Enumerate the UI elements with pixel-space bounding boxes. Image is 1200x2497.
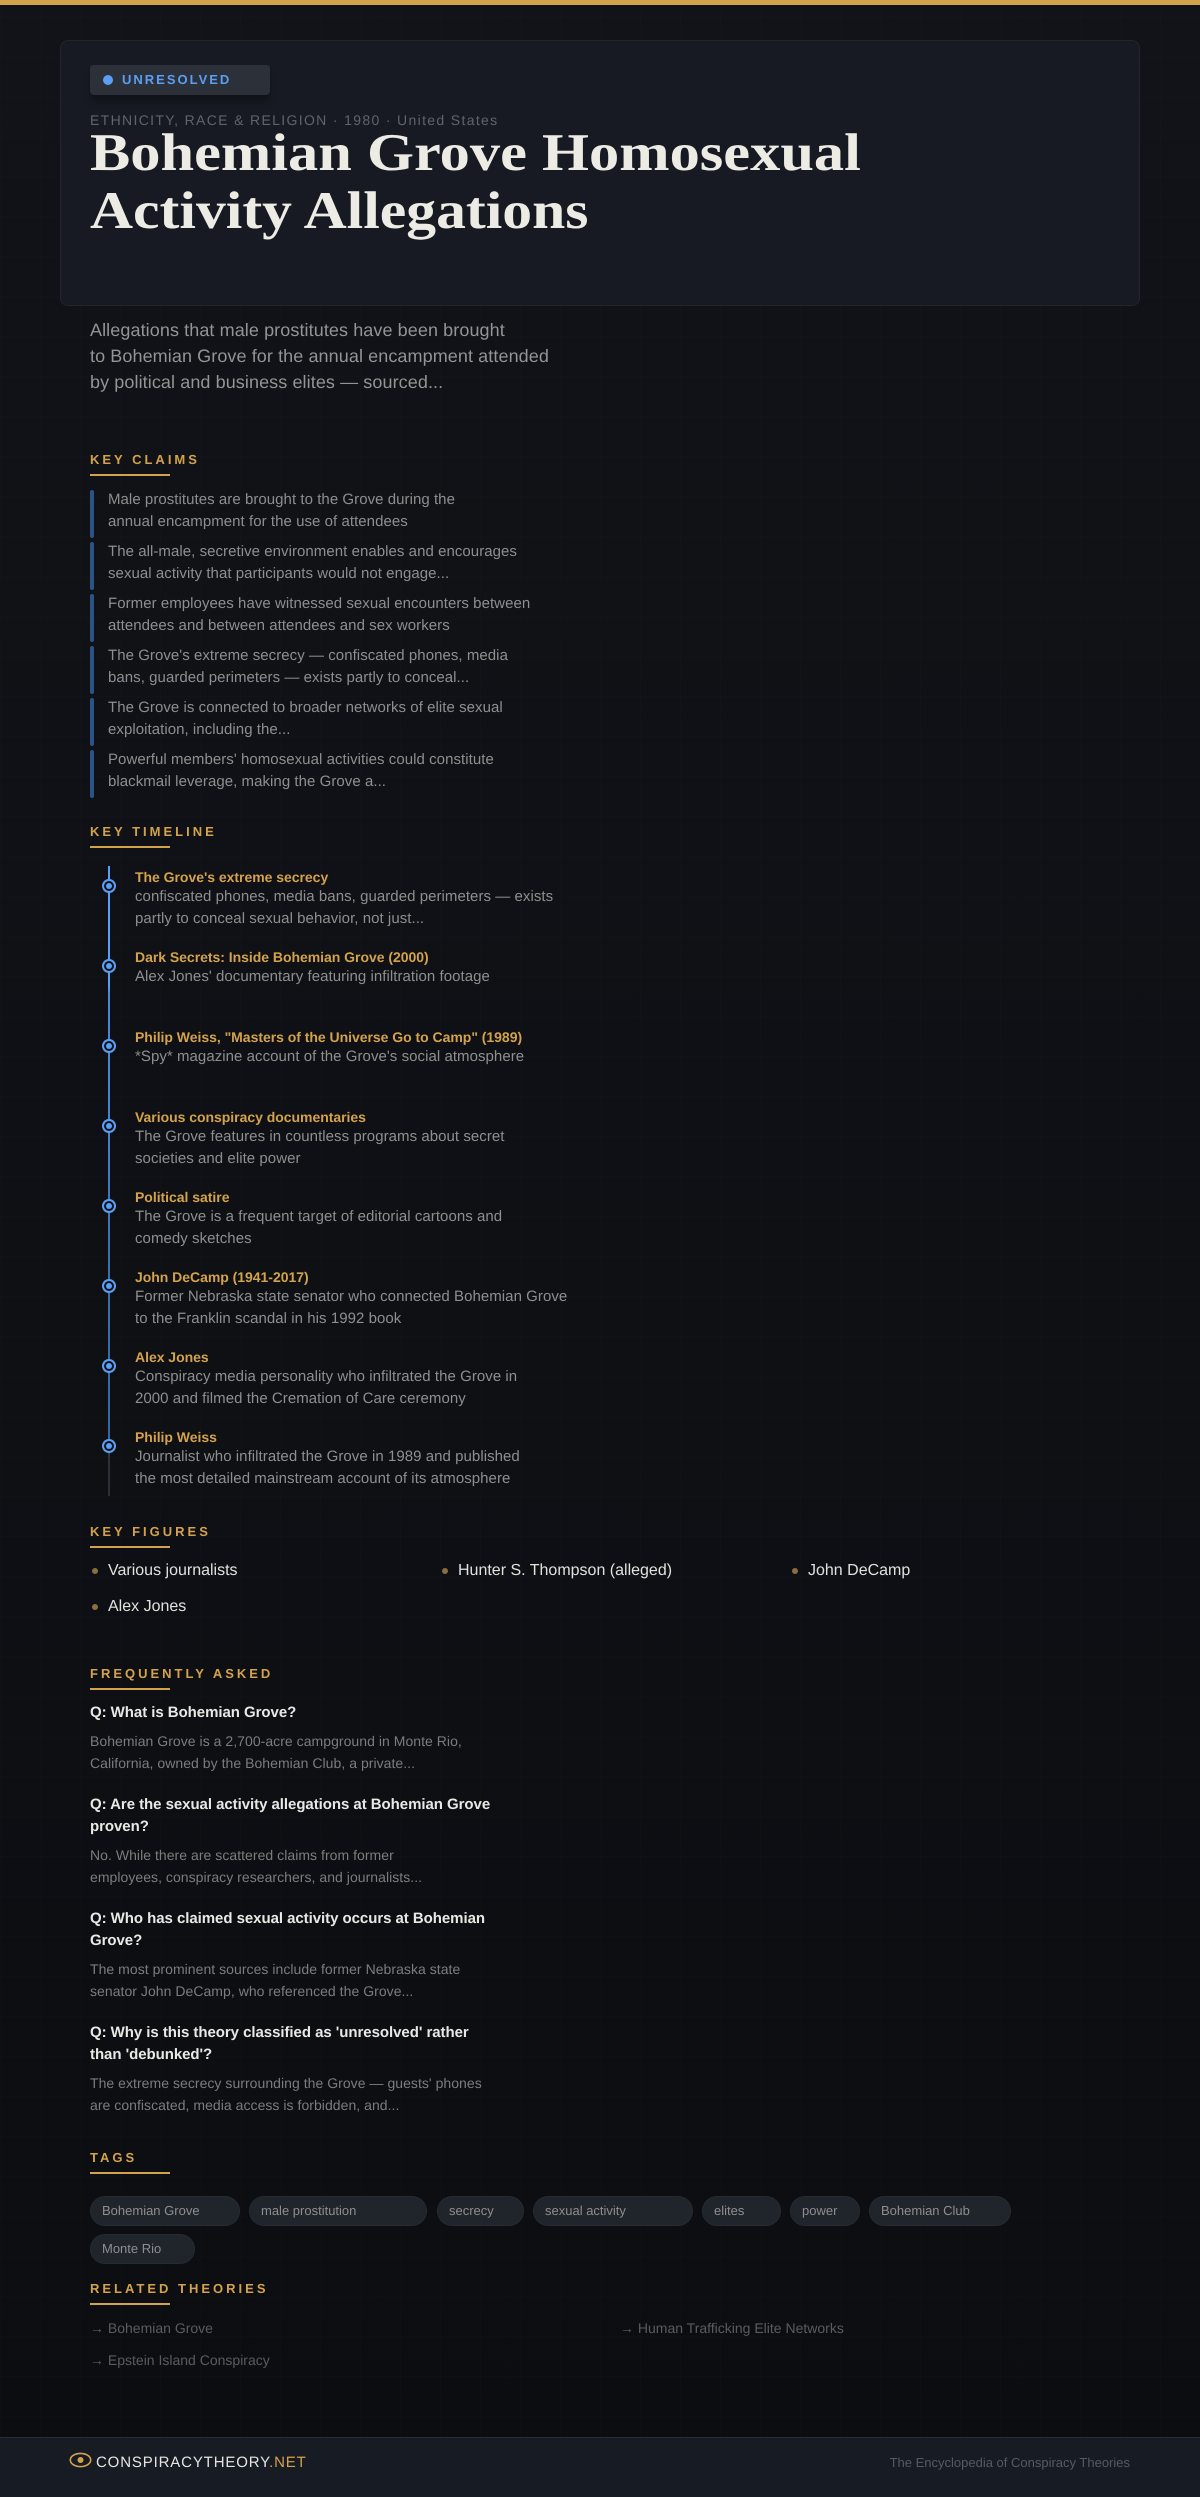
- question 3: [90, 1910, 485, 1949]
- claim 6: blackmail leverage, making the Grove a...: [108, 772, 386, 790]
- tag: [869, 2196, 1011, 2226]
- question 4: than 'debunked'?: [90, 2046, 212, 2063]
- key figures list: [92, 1562, 910, 1615]
- event 1: confiscated phones, media bans, guarded perimeters — exists: [135, 888, 553, 905]
- tag: Bohemian Grove: [102, 2203, 200, 2218]
- related link: Human Trafficking: → Human Trafficking Elite Networks: [620, 2320, 844, 2336]
- badge label: UNRESOLVED: [122, 72, 231, 87]
- answer 3: [90, 1961, 460, 1999]
- timeline node 2: [102, 959, 116, 973]
- question 4: Q: Why is this theory classified as 'unresolved' rather: [90, 2024, 469, 2041]
- footer tagline: The Encyclopedia of Conspiracy Theories: [890, 2455, 1130, 2470]
- top accent bar: [0, 0, 1200, 5]
- timeline node 5: [102, 1199, 116, 1213]
- event 2: [135, 949, 490, 985]
- question 1: Q: What is Bohemian Grove?: [90, 1704, 296, 1721]
- answer 2: [90, 1847, 422, 1885]
- tag: Bohemian Club: [881, 2203, 970, 2218]
- title: Bohemian Grove Homosexual: [90, 124, 861, 182]
- event 4: The Grove features in countless programs about secret: [135, 1128, 504, 1145]
- heading: frequently asked: FREQUENTLY ASKED: [90, 1666, 273, 1681]
- tag: [702, 2196, 781, 2226]
- figure: Alex Jones: Alex Jones: [108, 1598, 186, 1615]
- footer: [0, 2437, 1200, 2497]
- claim 1: annual encampment for the use of attendees: [108, 512, 408, 530]
- claim 4: The Grove's extreme secrecy — confiscated phones, media: [108, 646, 508, 664]
- answer 3: The most prominent sources include former Nebraska state: [90, 1961, 460, 1977]
- icon: status dot: [103, 75, 113, 85]
- event 6: Former Nebraska state senator who connected Bohemian Grove: [135, 1288, 567, 1305]
- tag pills: [90, 2196, 1011, 2264]
- claim 6: Powerful members' homosexual activities could constitute: [108, 750, 494, 768]
- timeline node 3: [102, 1039, 116, 1053]
- figure: John DeCamp: John DeCamp: [808, 1562, 910, 1579]
- tag: [90, 2196, 240, 2226]
- event 1: [135, 869, 553, 927]
- timeline node 4: [102, 1119, 116, 1133]
- timeline node 8: [102, 1439, 116, 1453]
- related link: Bohemian Grove: → Bohemian Grove: [90, 2320, 213, 2336]
- event 5: The Grove is a frequent target of editorial cartoons and: [135, 1208, 502, 1225]
- event 6: to the Franklin scandal in his 1992 book: [135, 1310, 401, 1327]
- timeline node 6: [102, 1279, 116, 1293]
- question 3: Q: Who has claimed sexual activity occurs at Bohemian: [90, 1910, 485, 1927]
- tag: sexual activity: [545, 2203, 626, 2218]
- tag: [249, 2196, 427, 2226]
- tag: [790, 2196, 860, 2226]
- claim 4: [90, 644, 550, 692]
- event 8: Journalist who infiltrated the Grove in 1989 and published: [135, 1448, 520, 1465]
- figure: Various journalists: Various journalists: [108, 1562, 238, 1579]
- event 5: comedy sketches: [135, 1230, 252, 1247]
- claim 6: [90, 748, 550, 796]
- heading: key figures: KEY FIGURES: [90, 1524, 211, 1539]
- claim 5: exploitation, including the...: [108, 720, 290, 738]
- answer 2: No. While there are scattered claims from former: [90, 1847, 394, 1863]
- heading: key timeline: KEY TIMELINE: [90, 824, 217, 839]
- claims list: [90, 490, 530, 798]
- panel: hero header: [60, 40, 1140, 306]
- tag: secrecy: [449, 2203, 494, 2218]
- event 4: societies and elite power: [135, 1150, 301, 1167]
- timeline: [102, 866, 567, 1496]
- question 4: [90, 2024, 469, 2063]
- tag: power: [802, 2203, 837, 2218]
- heading: related theories: RELATED THEORIES: [90, 2281, 268, 2296]
- timeline spine: [108, 866, 110, 1496]
- footer brand: CONSPIRACYTHEORY.NET: [96, 2454, 307, 2471]
- answer 1: Bohemian Grove is a 2,700-acre campground in Monte Rio,: [90, 1733, 462, 1749]
- claim 5: [90, 696, 550, 744]
- status badge: unresolved: [90, 65, 270, 95]
- tag: [533, 2196, 693, 2226]
- claim 5: The Grove is connected to broader networks of elite sexual: [108, 698, 503, 716]
- tag: male prostitution: [261, 2203, 356, 2218]
- claim 2: The all-male, secretive environment enables and encourages: [108, 542, 517, 560]
- event 5: Political satire: [135, 1189, 229, 1205]
- summary text: [90, 320, 549, 392]
- answer 2: employees, conspiracy researchers, and journalists...: [90, 1869, 422, 1885]
- claim 2: [90, 540, 550, 588]
- summary text: to Bohemian Grove for the annual encampment attended: [90, 346, 549, 366]
- timeline node 7: [102, 1359, 116, 1373]
- icon: eye logo: [70, 2452, 92, 2468]
- claim 2: sexual activity that participants would not engage...: [108, 564, 449, 582]
- event 3: [135, 1029, 524, 1065]
- claim 3: Former employees have witnessed sexual encounters between: [108, 594, 530, 612]
- answer 4: The extreme secrecy surrounding the Grove — guests' phones: [90, 2075, 482, 2091]
- answer 1: California, owned by the Bohemian Club, a private...: [90, 1755, 415, 1771]
- event 1: partly to conceal sexual behavior, not just...: [135, 910, 424, 927]
- event 7: Alex Jones: [135, 1349, 209, 1365]
- event 3: Philip Weiss, "Masters of the Universe Go to Camp" (1989): [135, 1029, 522, 1045]
- claim 4: bans, guarded perimeters — exists partly to conceal...: [108, 668, 469, 686]
- event 8: [135, 1429, 520, 1487]
- answer 4: are confiscated, media access is forbidden, and...: [90, 2097, 399, 2113]
- figure: Hunter S. Thompson: Hunter S. Thompson (alleged): [458, 1562, 672, 1579]
- heading: key claims: KEY CLAIMS: [90, 452, 200, 467]
- related theories list: [90, 2320, 844, 2368]
- event 8: Philip Weiss: [135, 1429, 217, 1445]
- question 3: Grove?: [90, 1932, 142, 1949]
- related link: Epstein Island: → Epstein Island Conspiracy: [90, 2352, 270, 2368]
- event 2: Dark Secrets: Inside Bohemian Grove (2000): [135, 949, 429, 965]
- question 2: [90, 1796, 490, 1835]
- event 6: [135, 1269, 567, 1327]
- FAQ list: [90, 1704, 490, 2113]
- summary text: Allegations that male prostitutes have been brought: [90, 320, 505, 340]
- timeline node 1: [102, 879, 116, 893]
- tag: Monte Rio: [102, 2241, 161, 2256]
- event 6: John DeCamp (1941-2017): [135, 1269, 309, 1285]
- tag: elites: [714, 2203, 744, 2218]
- heading: tags: TAGS: [90, 2150, 137, 2165]
- event 8: the most detailed mainstream account of its atmosphere: [135, 1470, 510, 1487]
- event 4: Various conspiracy documentaries: [135, 1109, 366, 1125]
- tag: [437, 2196, 524, 2226]
- claim 3: attendees and between attendees and sex workers: [108, 616, 450, 634]
- tag: [90, 2234, 195, 2264]
- summary text: by political and business elites — sourced...: [90, 372, 443, 392]
- question 2: Q: Are the sexual activity allegations at Bohemian Grove: [90, 1796, 490, 1813]
- title: Activity Allegations: [90, 182, 588, 240]
- event 2: Alex Jones' documentary featuring infiltration footage: [135, 968, 490, 985]
- event 7: [135, 1349, 517, 1407]
- event 7: 2000 and filmed the Cremation of Care ceremony: [135, 1390, 466, 1407]
- claim 3: [90, 592, 550, 640]
- answer 3: senator John DeCamp, who referenced the Grove...: [90, 1983, 413, 1999]
- event 1: The Grove's extreme secrecy: [135, 869, 328, 885]
- event 4: [135, 1109, 504, 1167]
- answer 4: [90, 2075, 482, 2113]
- event 7: Conspiracy media personality who infiltrated the Grove in: [135, 1368, 517, 1385]
- answer 1: [90, 1733, 462, 1771]
- question 2: proven?: [90, 1818, 149, 1835]
- title: [90, 124, 861, 240]
- category and date line: ETHNICITY, RACE & RELIGION · 1980 · United States: [90, 112, 499, 128]
- claim 1: [90, 488, 550, 536]
- claim 1: Male prostitutes are brought to the Grove during the: [108, 490, 455, 508]
- event 5: [135, 1189, 502, 1247]
- event 3: *Spy* magazine account of the Grove's social atmosphere: [135, 1048, 524, 1065]
